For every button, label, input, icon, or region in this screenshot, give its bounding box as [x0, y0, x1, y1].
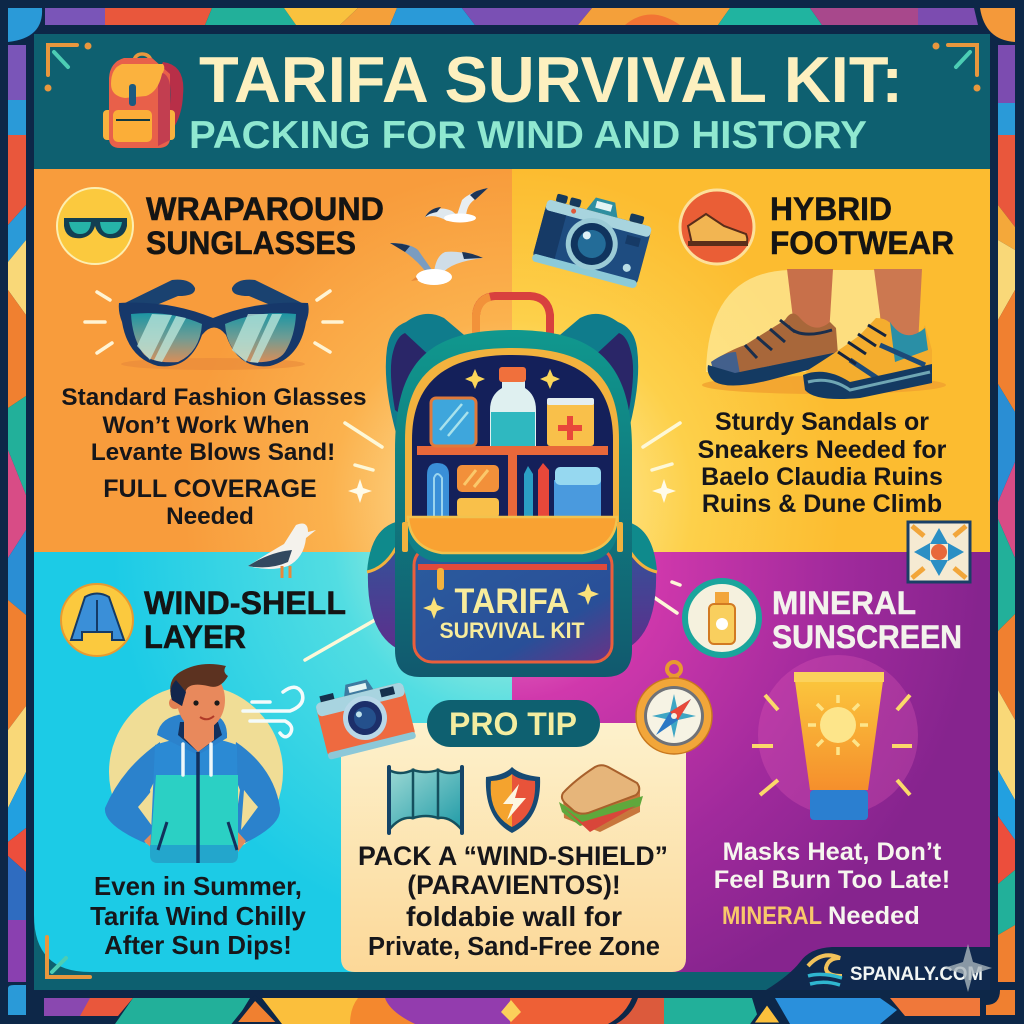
- illustration: sunglasses: [85, 280, 342, 370]
- heading: mineral sunscreen: SUNSCREEN: [772, 619, 962, 655]
- icon: compass: [636, 662, 712, 754]
- icon: seagulls: [390, 188, 488, 285]
- text: footwear description: Baelo Claudia Ruins: [701, 463, 943, 491]
- icon: jacket badge: [61, 584, 133, 656]
- text: pro tip description: (PARAVIENTOS)!: [407, 870, 621, 900]
- header band: [34, 34, 990, 168]
- illustration: man in wind shell: [105, 664, 303, 863]
- icon: decorative tile: [908, 522, 970, 582]
- badge: pro tip: PRO TIP: [449, 706, 577, 742]
- icon: sunglasses badge: [57, 188, 133, 264]
- panel: wind-shell background: [34, 552, 512, 972]
- panel: hybrid footwear background: [512, 169, 990, 552]
- rays and sparkles: [305, 423, 680, 660]
- heading: wind-shell layer: LAYER: [144, 619, 246, 655]
- panel: wraparound sunglasses background: [34, 169, 512, 552]
- heading: wind-shell layer: WIND-SHELL: [144, 585, 346, 621]
- icon: bottle badge: [685, 581, 759, 655]
- text: sunglasses description: Won’t Work When: [103, 412, 309, 439]
- pocket flap: [402, 517, 623, 562]
- panel: mineral sunscreen background: [512, 552, 990, 972]
- text: pro tip description: foldabie wall for: [406, 901, 622, 932]
- text: sunglasses description: Needed: [166, 503, 254, 530]
- text: footwear description: Sturdy Sandals or: [715, 408, 929, 436]
- panel: footwear content: [680, 190, 954, 518]
- text: sunscreen description: Masks Heat, Don’t: [723, 838, 942, 866]
- bottom mosaic strip: [44, 998, 980, 1024]
- icon: seagull standing: [248, 524, 316, 578]
- brand badge: spanaly.com: [766, 944, 992, 992]
- left mosaic strip: [8, 45, 26, 1015]
- text: wind-shell description: Tarifa Wind Chilly: [90, 903, 307, 931]
- shoulder straps: [386, 314, 638, 470]
- text: sunscreen description: Feel Burn Too Late!: [714, 866, 950, 894]
- backpack pocket label: SURVIVAL KIT: [440, 618, 585, 643]
- subtitle: PACKING FOR WIND AND HISTORY: [189, 114, 867, 157]
- right shoe: [805, 318, 932, 382]
- compartment items: [427, 367, 601, 518]
- text: sunglasses description: FULL COVERAGE: [103, 475, 317, 503]
- title: TARIFA SURVIVAL KIT:: [199, 43, 903, 116]
- backpack pocket label: TARIFA: [454, 582, 570, 621]
- panel: sunscreen content: [685, 581, 962, 930]
- text: sunglasses description: Levante Blows Sand!: [91, 439, 335, 466]
- central backpack: [305, 296, 680, 677]
- bottom centre diamond: [501, 1000, 521, 1022]
- badge: pro tip: [427, 700, 600, 747]
- backpack pocket label: [423, 369, 599, 643]
- backpack top handle: [476, 296, 550, 335]
- icon: shield: [486, 767, 540, 833]
- illustration: sunscreen tube: [752, 655, 918, 820]
- text: sunglasses description: Standard Fashion Glasses: [61, 384, 367, 411]
- illustration: hiking shoes and legs: [702, 269, 946, 399]
- heading: hybrid footwear: FOOTWEAR: [770, 225, 954, 261]
- heading: wraparound sunglasses: WRAPAROUND: [146, 191, 384, 227]
- text: wind-shell description: After Sun Dips!: [104, 932, 292, 960]
- front pocket: [414, 547, 612, 662]
- text: pro tip description: Private, Sand-Free Zone: [368, 933, 660, 961]
- right mosaic strip: [986, 45, 1015, 1015]
- heading: wraparound sunglasses: SUNGLASSES: [146, 225, 356, 261]
- icon: small backpack: [103, 54, 183, 148]
- icon: small camera: [312, 671, 416, 760]
- icon: sandwich: [559, 765, 643, 832]
- icon: shoe badge: [680, 190, 754, 264]
- corner bracket bottom left: [47, 937, 90, 977]
- text: footwear description: Sneakers Needed for: [698, 436, 947, 464]
- inner compartment: [405, 348, 619, 525]
- text: pro tip description: PACK A “WIND-SHIELD”: [358, 841, 668, 871]
- left shoe: [711, 313, 838, 375]
- text: sunscreen description: MINERAL: [722, 902, 822, 930]
- text: sunscreen description: Needed: [828, 902, 920, 930]
- heading: hybrid footwear: HYBRID: [770, 191, 892, 227]
- text: wind-shell description: Even in Summer,: [94, 873, 302, 901]
- panel: wind-shell content: [61, 584, 346, 960]
- brand badge: spanaly.com: SPANALY.COM: [850, 963, 983, 985]
- panel: sunglasses content: [57, 188, 384, 530]
- pocket zip: [418, 564, 607, 590]
- shelf: [417, 446, 608, 455]
- text: footwear description: Ruins & Dune Climb: [702, 490, 942, 518]
- backpack body: [395, 330, 632, 677]
- heading: mineral sunscreen: MINERAL: [772, 585, 916, 621]
- backpack side pockets: [367, 522, 657, 648]
- icon: camera top: [531, 186, 656, 289]
- pro tip card: [341, 700, 686, 972]
- bottom teal band: [34, 168, 990, 990]
- icon: folding windbreak: [389, 767, 462, 833]
